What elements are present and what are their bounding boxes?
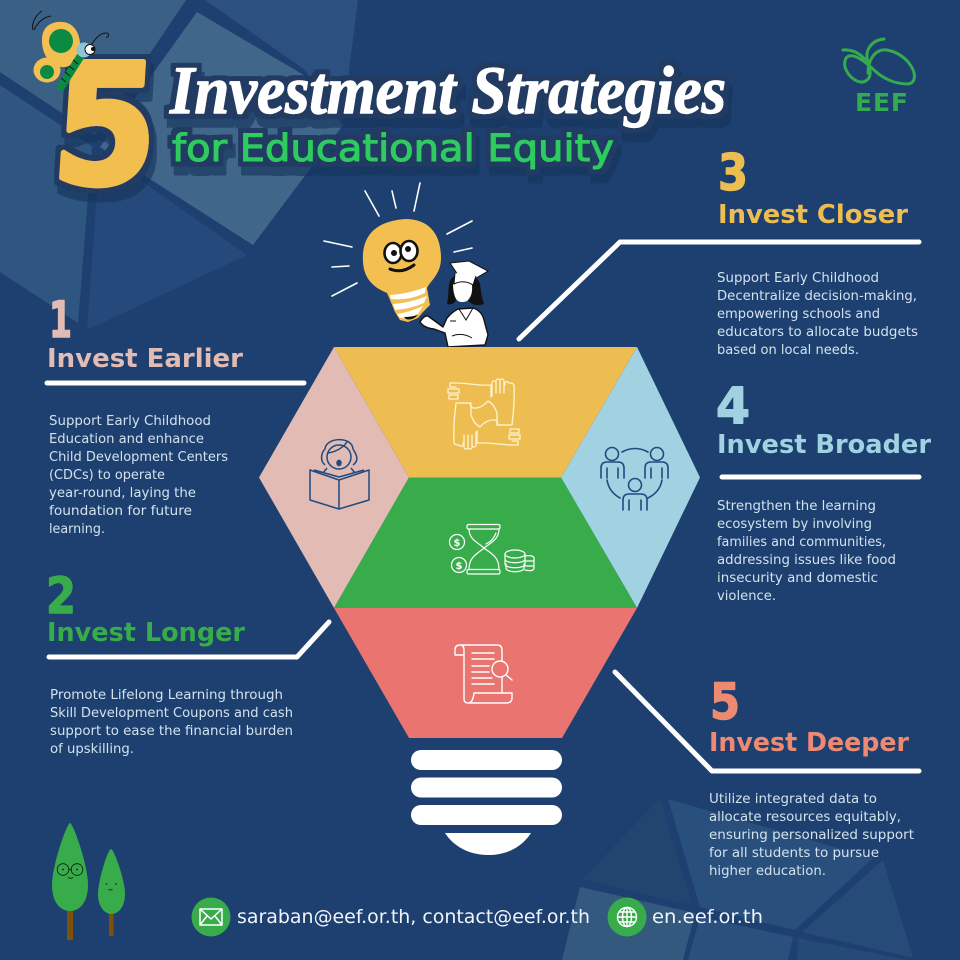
strategy 1: invest earlier: Child Development Centers (49, 450, 228, 465)
strategy 1: invest earlier (47, 291, 304, 537)
illustration: two trees (52, 823, 125, 940)
logo: EEF (843, 39, 914, 117)
strategy 3: invest closer: educators to allocate budgets (717, 325, 918, 340)
icon: hourglass and coins: $ (454, 538, 461, 549)
strategy 4: invest broader: Invest Broader (717, 430, 931, 460)
strategy 5: invest deeper: for all students to pursue (709, 846, 879, 861)
icon: community of three people (601, 448, 668, 510)
icon: butterfly (33, 11, 109, 87)
strategy 4: invest broader: addressing issues like food (717, 553, 896, 568)
panel: hexagon bulb head (259, 347, 700, 738)
strategy 1: invest earlier: year-round, laying the (49, 486, 196, 501)
panel: blue segment (561, 347, 700, 608)
contact: email (192, 898, 590, 936)
strategy 5: invest deeper: 5 (710, 673, 740, 731)
strategy 1: invest earlier: foundation for future (49, 504, 192, 519)
panel: red segment (334, 608, 637, 738)
strategy 4: invest broader: Strengthen the learning (717, 499, 876, 514)
strategy 3: invest closer: 3 (718, 144, 748, 202)
strategy 3: invest closer: based on local needs. (717, 343, 859, 358)
strategy 3: invest closer: Support Early Childhood (717, 271, 879, 286)
background shards bottom right (562, 799, 913, 960)
icon: hourglass and coins: $ (456, 561, 463, 572)
strategy 5: invest deeper: Utilize integrated data to (709, 792, 877, 807)
title big number 5: 5 (47, 30, 164, 223)
strategy 3: invest closer (519, 144, 919, 358)
strategy 2: invest longer: Promote Lifelong Learning through (50, 688, 283, 703)
strategy 2: invest longer: Skill Development Coupons and cash (50, 706, 293, 721)
panel: yellow segment (334, 347, 637, 478)
strategy 4: invest broader: families and communities, (717, 535, 886, 550)
strategy 1: invest earlier: learning. (49, 522, 105, 537)
icon: four joined hands (448, 379, 520, 449)
strategy 2: invest longer: of upskilling. (50, 742, 134, 757)
panel: green segment (334, 478, 637, 608)
strategy 4: invest broader (716, 377, 931, 604)
strategy 5: invest deeper (615, 672, 919, 879)
logo: EEF: EEF (855, 88, 908, 117)
contact: email: saraban@eef.or.th, contact@eef.or.th (237, 906, 590, 928)
strategy 4: invest broader: ecosystem by involving (717, 517, 872, 532)
icon: hourglass and coins (450, 524, 534, 574)
title subtitle: for Educational Equity (172, 127, 614, 170)
strategy 1: invest earlier: Support Early Childhood (49, 414, 211, 429)
strategy 3: invest closer: Decentralize decision-making, (717, 289, 917, 304)
strategy 1: invest earlier: 1 (49, 291, 72, 349)
contact: website: en.eef.or.th (652, 906, 763, 928)
strategy 2: invest longer: 2 (46, 567, 76, 625)
strategy 1: invest earlier: (CDCs) to operate (49, 468, 165, 483)
bulb screw base (411, 750, 562, 855)
strategy 5: invest deeper: Invest Deeper (709, 728, 909, 758)
illustration: graduate woman (420, 261, 488, 347)
background shards top left (0, 0, 358, 330)
strategy 2: invest longer: support to ease the financial burden (50, 724, 293, 739)
strategy 5: invest deeper: ensuring personalized support (709, 828, 914, 843)
strategy 3: invest closer: Invest Closer (718, 200, 908, 230)
title script line: Investment Strategies (169, 52, 726, 128)
strategy 2: invest longer: Invest Longer (47, 618, 245, 648)
strategy 2: invest longer (46, 567, 329, 757)
strategy 4: invest broader: 4 (716, 377, 750, 435)
strategy 4: invest broader: violence. (717, 589, 776, 604)
strategy 1: invest earlier: Invest Earlier (47, 344, 243, 374)
strategy 5: invest deeper: allocate resources equitably, (709, 810, 901, 825)
strategy 5: invest deeper: higher education. (709, 864, 826, 879)
strategy 4: invest broader: insecurity and domestic (717, 571, 878, 586)
contact: website (608, 898, 763, 936)
panel: pink segment (259, 347, 409, 608)
icon: reading child (310, 440, 369, 509)
icon: smiling light bulb with rays (324, 183, 472, 322)
strategy 3: invest closer: empowering schools and (717, 307, 880, 322)
strategy 1: invest earlier: Education and enhance (49, 432, 204, 447)
icon: scroll with magnifier (455, 645, 512, 703)
